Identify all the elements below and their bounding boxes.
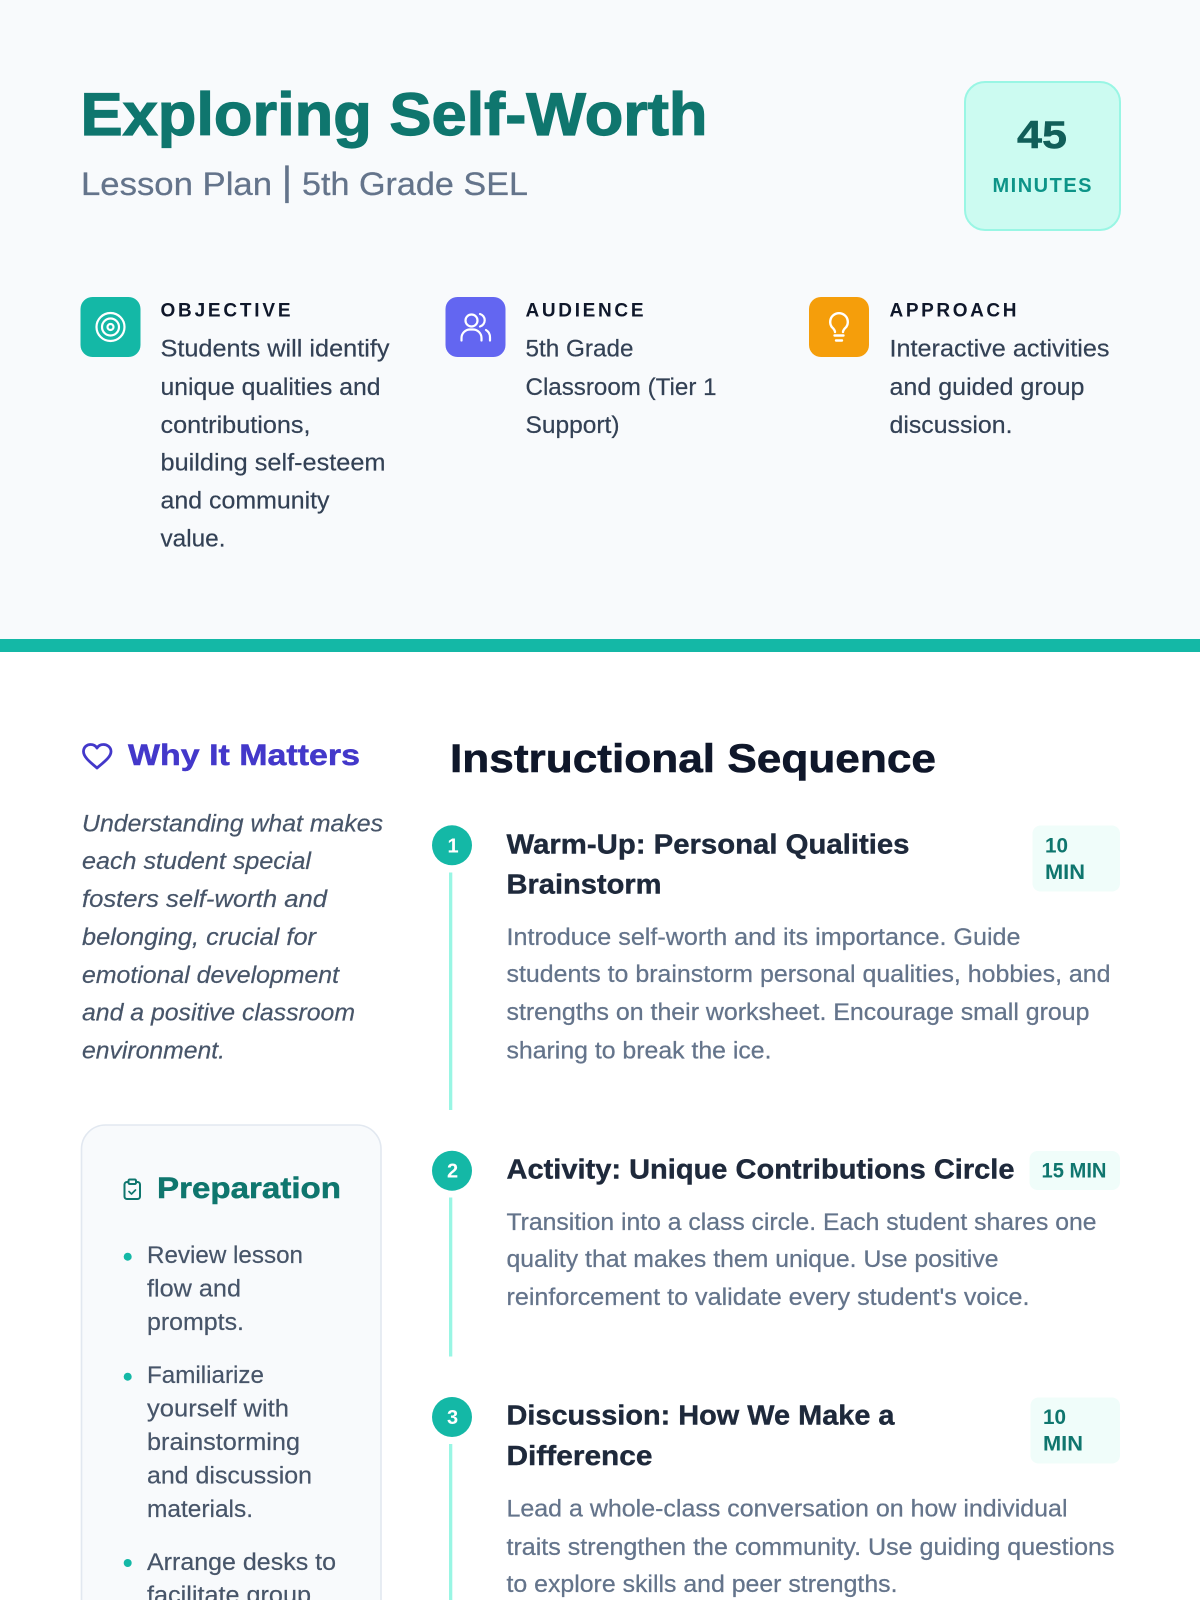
step 2 description: reinforcement to validate every student's voice. — [506, 1284, 1030, 1311]
list item: familiarize: Familiarize — [147, 1362, 264, 1389]
step 3 description: traits strengthen the community. Use guiding questions — [506, 1534, 1114, 1561]
heading: Why It Matters — [128, 739, 360, 772]
icon: lightbulb — [809, 297, 869, 357]
title: Exploring Self-Worth — [80, 81, 708, 148]
list item: review: prompts. — [147, 1309, 244, 1336]
preparation heading: Preparation — [157, 1172, 341, 1205]
step number 2 — [432, 1151, 472, 1191]
icon: clipboard — [124, 1180, 140, 1199]
step 2 description: Transition into a class circle. Each student shares one — [506, 1209, 1096, 1236]
heading: instructional sequence: Instructional Sequence — [450, 737, 936, 781]
connector line 1 — [449, 872, 452, 1110]
list item: review: Review lesson — [147, 1242, 303, 1269]
step 3 title — [506, 1400, 895, 1471]
time tag 10 min — [1032, 826, 1120, 892]
step number 3 — [432, 1397, 472, 1437]
time tag 10 min: MIN — [1043, 1432, 1083, 1456]
step number 2: 2 — [447, 1160, 458, 1182]
approach text: and guided group — [890, 374, 1084, 401]
time tag 10 min: 10 — [1043, 1406, 1066, 1429]
step 2 — [432, 1151, 1120, 1356]
subtitle — [81, 160, 528, 204]
duration badge: MINUTES — [992, 175, 1092, 197]
list item: familiarize: and discussion — [147, 1462, 312, 1490]
step 1 title — [506, 828, 910, 900]
objective text: contributions, — [160, 412, 310, 439]
connector line 2 — [449, 1198, 452, 1356]
audience text: Support) — [526, 412, 620, 439]
italic paragraph: environment. — [82, 1038, 225, 1064]
step 2 description — [506, 1209, 1096, 1311]
step 1 title: Warm-Up: Personal Qualities — [506, 828, 910, 860]
audience text: AUDIENCE — [526, 300, 644, 322]
panel: preparation — [82, 1125, 381, 1600]
italic paragraph: and a positive classroom — [82, 1000, 355, 1026]
header panel — [0, 0, 1200, 652]
objective text — [160, 300, 390, 552]
objective text: and community — [160, 488, 330, 514]
list item: arrange: Arrange desks to — [147, 1549, 336, 1576]
step 3 — [432, 1397, 1120, 1600]
objective item — [80, 297, 390, 552]
objective text: Students will identify — [160, 336, 390, 362]
step 3 description — [506, 1496, 1114, 1598]
subtitle: | — [282, 160, 292, 204]
step 2 title: Activity: Unique Contributions Circle — [506, 1154, 1014, 1184]
why it matters — [82, 739, 383, 1064]
italic paragraph — [82, 810, 383, 1064]
time tag 10 min — [1030, 1398, 1120, 1464]
approach item — [809, 297, 1110, 439]
list item: arrange — [124, 1549, 336, 1600]
time tag 15 min: 15 MIN — [1042, 1160, 1106, 1182]
step 1 description — [506, 924, 1110, 1064]
step 1 description: sharing to break the ice. — [506, 1038, 772, 1064]
list item: familiarize: yourself with — [147, 1396, 289, 1422]
objective text: OBJECTIVE — [160, 300, 290, 322]
list item: familiarize: brainstorming — [147, 1429, 300, 1456]
objective text: unique qualities and — [160, 374, 380, 401]
approach text: APPROACH — [890, 300, 1016, 322]
list item: review: flow and — [147, 1276, 241, 1302]
time tag 10 min: MIN — [1045, 861, 1085, 884]
step number 1: 1 — [447, 836, 459, 858]
step 2 description: quality that makes them unique. Use positive — [506, 1246, 998, 1273]
objective text: value. — [160, 526, 226, 552]
time tag 15 min — [1030, 1151, 1120, 1190]
audience text — [526, 300, 716, 439]
step 3 title: Discussion: How We Make a — [506, 1400, 895, 1430]
duration badge: 45 — [1017, 114, 1067, 157]
step 1 — [432, 825, 1120, 1110]
italic paragraph: belonging, crucial for — [82, 924, 317, 951]
duration badge — [965, 82, 1120, 230]
italic paragraph: fosters self-worth and — [82, 886, 328, 913]
icon: target — [80, 297, 140, 357]
step 1 description: Introduce self-worth and its importance. Guide — [506, 924, 1020, 951]
step 3 description: Lead a whole-class conversation on how individual — [506, 1496, 1068, 1522]
approach text — [890, 300, 1110, 439]
audience item — [446, 297, 716, 439]
audience text: Classroom (Tier 1 — [526, 374, 716, 401]
time tag 10 min: 10 — [1045, 834, 1068, 858]
audience text: 5th Grade — [526, 336, 634, 362]
step 3 title: Difference — [506, 1440, 652, 1471]
step number 3: 3 — [447, 1407, 458, 1429]
italic paragraph: Understanding what makes — [82, 810, 383, 838]
list item: familiarize: materials. — [147, 1496, 253, 1523]
list item: review — [124, 1242, 303, 1336]
italic paragraph: emotional development — [82, 962, 340, 989]
step number 1 — [432, 825, 472, 865]
icon: heart — [84, 744, 111, 768]
step 1 description: students to brainstorm personal qualities, hobbies, and — [506, 961, 1110, 988]
list item: familiarize — [124, 1362, 312, 1523]
icon: users — [446, 297, 506, 357]
approach text: Interactive activities — [890, 336, 1110, 362]
subtitle: Lesson Plan — [81, 166, 272, 202]
step 1 description: strengths on their worksheet. Encourage small group — [506, 999, 1090, 1026]
step 1 title: Brainstorm — [506, 868, 662, 900]
objective text: building self-esteem — [160, 450, 386, 476]
italic paragraph: each student special — [82, 848, 312, 875]
subtitle: 5th Grade SEL — [302, 166, 528, 202]
connector line 3 — [449, 1444, 452, 1600]
approach text: discussion. — [890, 412, 1012, 439]
step 3 description: to explore skills and peer strengths. — [506, 1571, 898, 1598]
